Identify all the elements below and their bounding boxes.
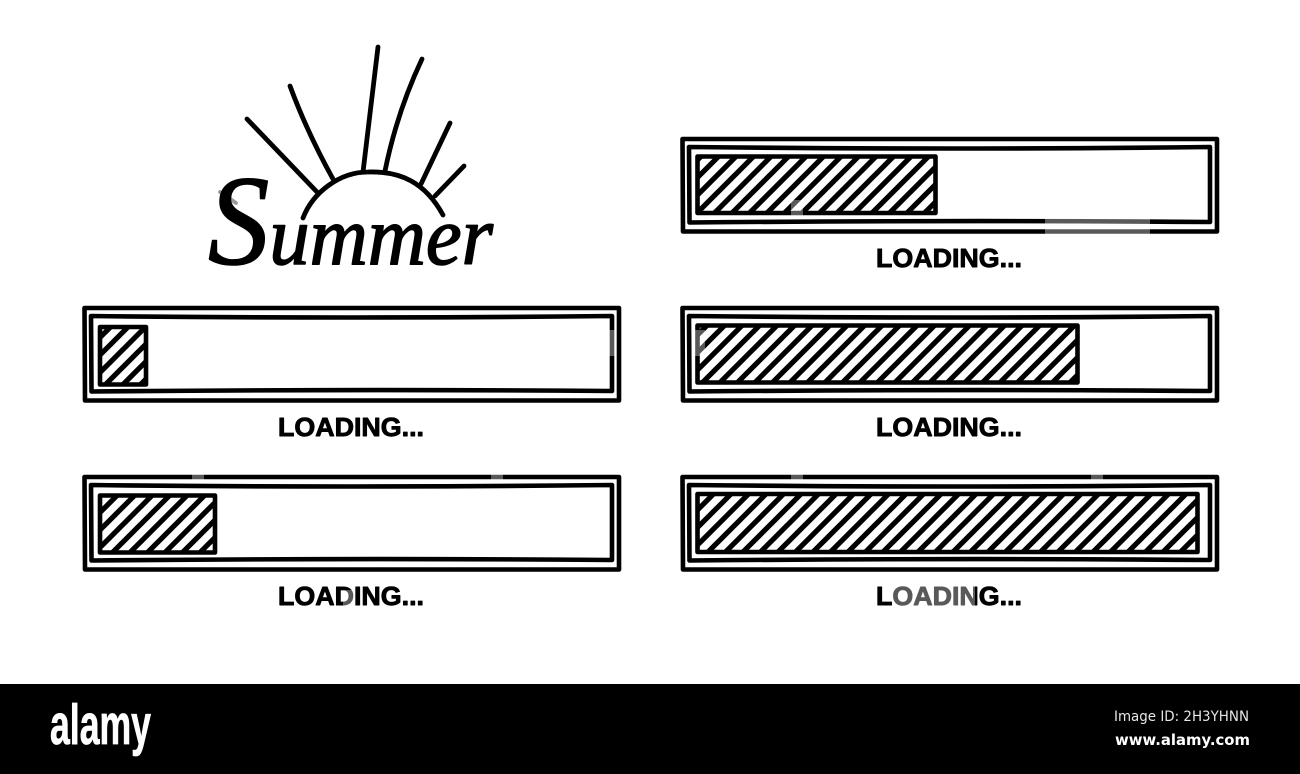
label: loading text: LOADING... (278, 412, 424, 442)
label: loading text: LOADING... (876, 243, 1022, 273)
panel: loading bar 10 percent (84, 308, 619, 400)
icon: summer sun with rays (247, 47, 464, 218)
title: Summer lettering: Summer (208, 150, 493, 292)
panel: loading bar 100 percent (682, 477, 1217, 570)
logo: alamy: alamy (50, 693, 151, 757)
watermark residue marks (192, 200, 1150, 608)
footer band (0, 684, 1300, 774)
panel: loading bar 25 percent (84, 477, 619, 570)
stray grey watermark stroke (220, 192, 236, 203)
label: loading text: LOADING... (278, 581, 424, 611)
panel: loading bar 70 percent (682, 308, 1217, 400)
label: loading text: LOADING... (876, 412, 1022, 442)
panel: loading bar 45 percent (682, 139, 1217, 232)
website: www.alamy.com (1115, 731, 1250, 749)
label: loading text: LOADING... (876, 581, 1022, 611)
image id: Image ID: 2H3YHNN (1114, 709, 1249, 725)
